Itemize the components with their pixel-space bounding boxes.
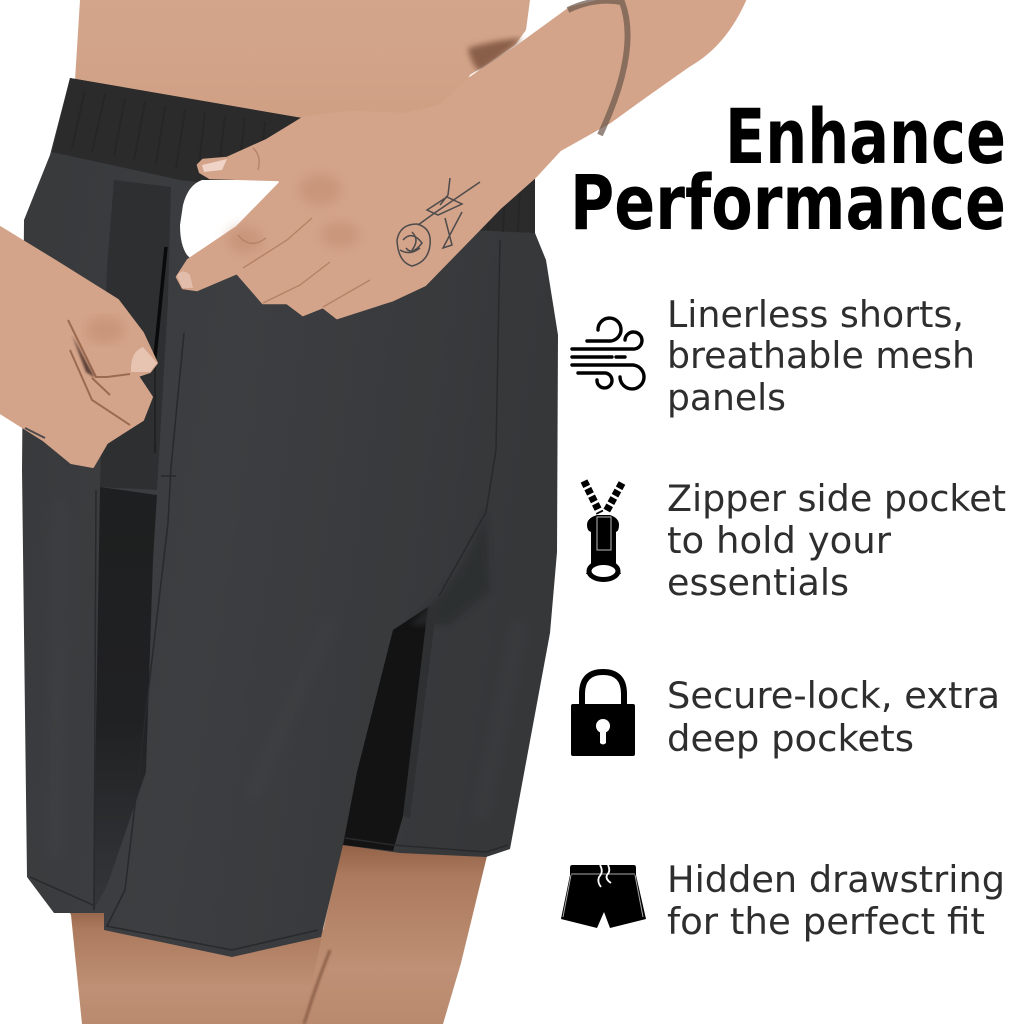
text: linerless: breathable mesh bbox=[667, 334, 975, 377]
hand tattoo: rose bbox=[397, 178, 480, 266]
text: zipper: Zipper side pocket bbox=[667, 477, 1006, 520]
text: linerless bbox=[667, 293, 975, 419]
text: lock: Secure-lock, extra bbox=[667, 674, 1000, 717]
crotch shadow bbox=[410, 512, 490, 625]
feature: zipper pocket bbox=[584, 477, 1006, 604]
text: zipper bbox=[667, 477, 1006, 604]
icon: zipper bbox=[584, 481, 622, 580]
lower side mesh panel bbox=[93, 487, 157, 911]
waistband bbox=[52, 78, 350, 200]
knuckle shading bbox=[227, 174, 360, 254]
finger creases bbox=[238, 148, 370, 307]
feature: hidden drawstring bbox=[561, 858, 1005, 943]
text: zipper: to hold your bbox=[667, 519, 891, 562]
phone in pocket bbox=[180, 180, 296, 270]
legs bbox=[66, 840, 487, 1024]
text: lock bbox=[667, 674, 1000, 760]
feature: secure lock bbox=[571, 672, 1000, 760]
shorts bbox=[22, 78, 558, 957]
torso bbox=[75, 0, 530, 130]
fold highlights bbox=[55, 500, 520, 860]
upper mesh panel bbox=[100, 180, 171, 490]
right hand and forearm bbox=[177, 0, 745, 318]
text: drawstring bbox=[667, 858, 1005, 943]
text: linerless: Linerless shorts, bbox=[667, 293, 964, 336]
left hand bbox=[0, 227, 157, 467]
zipper bbox=[154, 247, 166, 367]
icon: padlock bbox=[571, 672, 635, 756]
waistband ribs bbox=[72, 90, 520, 232]
photo: man wearing shorts bbox=[0, 0, 745, 1024]
heading bbox=[570, 92, 1006, 247]
wrist band tattoo bbox=[568, 1, 628, 135]
icon: shorts bbox=[561, 865, 646, 928]
navel shadow bbox=[468, 38, 522, 72]
text: linerless: panels bbox=[667, 376, 786, 419]
text: drawstring: for the perfect fit bbox=[667, 900, 985, 943]
rear mesh panel bbox=[343, 607, 428, 851]
text: drawstring: Hidden drawstring bbox=[667, 858, 1005, 901]
icon: wind bbox=[572, 318, 644, 389]
feature: linerless shorts bbox=[572, 293, 975, 419]
text: zipper: essentials bbox=[667, 561, 849, 604]
seams bbox=[30, 240, 508, 950]
text: lock: deep pockets bbox=[667, 717, 914, 760]
